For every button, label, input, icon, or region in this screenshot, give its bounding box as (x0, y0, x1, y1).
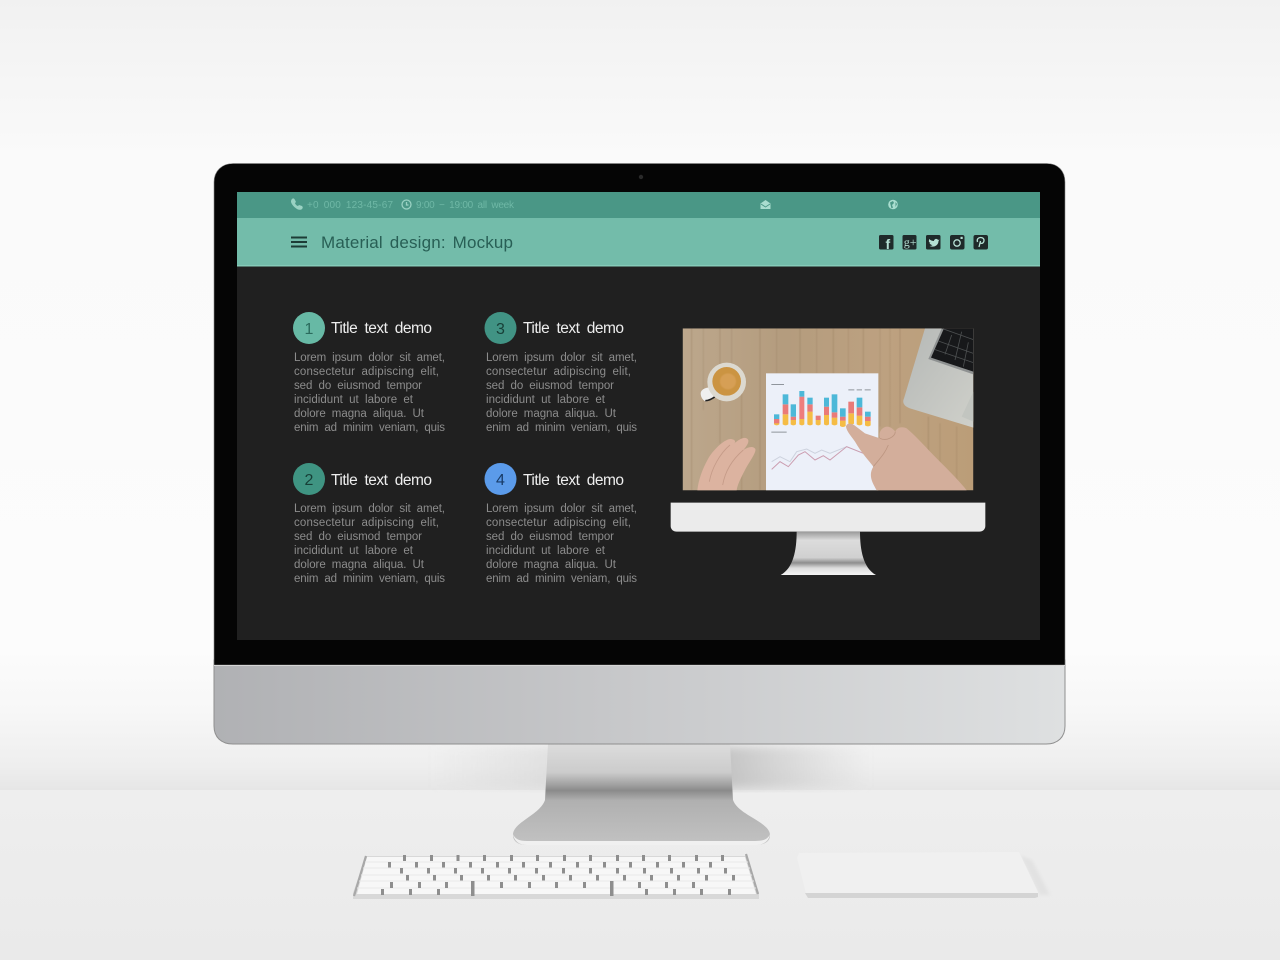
number badge 4 (484, 463, 516, 495)
opening hours: 9:00 − 19:00 all week (416, 200, 515, 211)
item 1 body: Lorem ipsum dolor sit amet, (294, 352, 445, 364)
item 2 body: consectetur adipiscing elit, (294, 517, 439, 529)
item 2 body: Lorem ipsum dolor sit amet, (294, 503, 445, 515)
item 2 body (294, 503, 445, 585)
icon: twitter (926, 235, 940, 250)
number badge 3: 3 (496, 321, 505, 338)
item 1 body: dolore magna aliqua. Ut (294, 408, 425, 420)
paper report (766, 373, 878, 490)
icon: clock (402, 200, 411, 209)
keyboard (353, 854, 759, 899)
number badge 2: 2 (305, 472, 314, 489)
item 1 body (294, 352, 445, 434)
item 4 body: sed do eiusmod tempor (486, 531, 614, 543)
stacked bars (774, 391, 871, 427)
item 2 body: dolore magna aliqua. Ut (294, 559, 425, 571)
screen background (237, 192, 1040, 640)
item 3 body: dolore magna aliqua. Ut (486, 408, 617, 420)
item 1 body: enim ad minim veniam, quis (294, 422, 445, 434)
keyboard side edges (354, 854, 758, 896)
line chart (772, 447, 863, 462)
number badge 4: 4 (496, 472, 505, 489)
item 4 (484, 463, 637, 585)
item 2 (293, 463, 445, 585)
item 2 title: Title text demo (331, 472, 432, 489)
item 4 body: consectetur adipiscing elit, (486, 517, 631, 529)
icon: globe (888, 200, 898, 209)
item 3 title: Title text demo (523, 320, 624, 337)
item 1 body: incididunt ut labore et (294, 394, 414, 406)
item 3 body: sed do eiusmod tempor (486, 380, 614, 392)
right hand shading (873, 432, 895, 467)
number badge 3 (484, 312, 516, 344)
icon: instagram (950, 235, 964, 250)
item 4 title: Title text demo (523, 472, 624, 489)
item 2 body: enim ad minim veniam, quis (294, 573, 445, 585)
photo: desk with charts (683, 328, 973, 490)
item 4 body: dolore magna aliqua. Ut (486, 559, 617, 571)
item 3 body: Lorem ipsum dolor sit amet, (486, 352, 637, 364)
small monitor chin (671, 503, 985, 532)
keyboard key gaps (381, 855, 735, 896)
small monitor stand (781, 532, 876, 575)
icon: google plus: g+ (904, 235, 917, 249)
webcam (639, 175, 643, 179)
trackpad (797, 852, 1050, 898)
phone number: +0 000 123-45-67 (307, 200, 393, 211)
item 4 body: enim ad minim veniam, quis (486, 573, 637, 585)
right hand (846, 424, 967, 490)
social icons (879, 235, 988, 252)
icon: menu (291, 236, 307, 248)
header bar (237, 218, 1040, 266)
trackpad shadow (1020, 855, 1050, 895)
item 1 body: sed do eiusmod tempor (294, 380, 422, 392)
item 2 body: incididunt ut labore et (294, 545, 414, 557)
header title: Material design: Mockup (321, 233, 513, 252)
item 3 body: enim ad minim veniam, quis (486, 422, 637, 434)
number badge 1: 1 (305, 321, 314, 338)
item 4 body: incididunt ut labore et (486, 545, 606, 557)
item 2 body: sed do eiusmod tempor (294, 531, 422, 543)
monitor body (214, 164, 1065, 744)
monitor stand (513, 744, 770, 845)
item 1 body: consectetur adipiscing elit, (294, 366, 439, 378)
left hand finger gaps (709, 445, 743, 485)
small monitor mockup (671, 328, 985, 575)
item 1 (293, 312, 445, 434)
item 4 body: Lorem ipsum dolor sit amet, (486, 503, 637, 515)
item 4 body (486, 503, 637, 585)
item 3 body (486, 352, 637, 434)
keyboard body (353, 856, 759, 899)
icon: facebook: f (886, 236, 890, 252)
keyboard row lines (357, 862, 756, 888)
trackpad rim (805, 893, 1038, 898)
monitor shadow on wall (430, 746, 870, 788)
icon: phone (291, 198, 303, 210)
top info bar (237, 192, 1040, 218)
icon: mail (760, 200, 770, 209)
item 3 body: incididunt ut labore et (486, 394, 606, 406)
trackpad surface (797, 852, 1038, 894)
background: desk (0, 790, 1280, 960)
monitor bezel (214, 164, 1065, 665)
chart labels (771, 384, 871, 433)
monitor chin (214, 660, 1065, 744)
laptop (903, 328, 973, 428)
left hand (697, 438, 755, 490)
number badge 1 (293, 312, 325, 344)
icon: pinterest (974, 235, 988, 250)
number badge 2 (293, 463, 325, 495)
coffee cup (701, 363, 746, 401)
chin highlight (214, 665, 1065, 666)
item 3 body: consectetur adipiscing elit, (486, 366, 631, 378)
item 3 (484, 312, 637, 434)
item 1 title: Title text demo (331, 320, 432, 337)
screen (237, 192, 1040, 640)
